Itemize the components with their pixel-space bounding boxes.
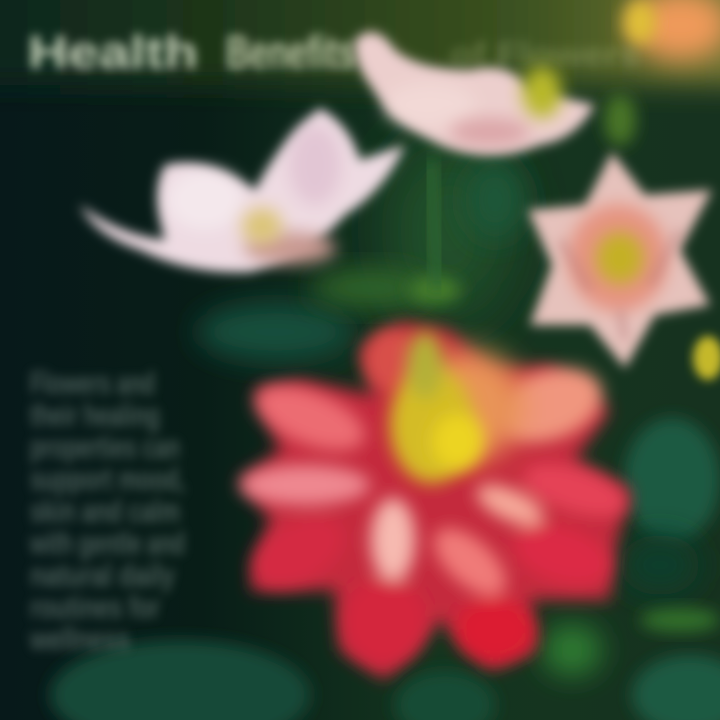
body text block: with gentle and [29, 525, 185, 561]
flower: star pink [528, 152, 712, 368]
flower: top [355, 32, 595, 155]
body text block: routines for [30, 589, 160, 625]
body text block: skin and calm [30, 493, 180, 529]
body text block: wellness [29, 621, 130, 657]
body text block: natural daily [30, 557, 175, 593]
body text block: their healing [30, 397, 160, 433]
flower: red dahlia [240, 322, 633, 680]
dahlia petals [240, 328, 633, 666]
body text block: properties can [30, 429, 180, 465]
heading text: Benefits [226, 26, 356, 78]
heading text [28, 26, 640, 78]
body text block: support mood, [30, 461, 185, 497]
flower: left white [80, 108, 405, 272]
body text block: Flowers and [30, 365, 155, 401]
heading text: of Flowers [450, 36, 640, 74]
heading text: Health [28, 26, 198, 78]
body text block [29, 365, 185, 657]
